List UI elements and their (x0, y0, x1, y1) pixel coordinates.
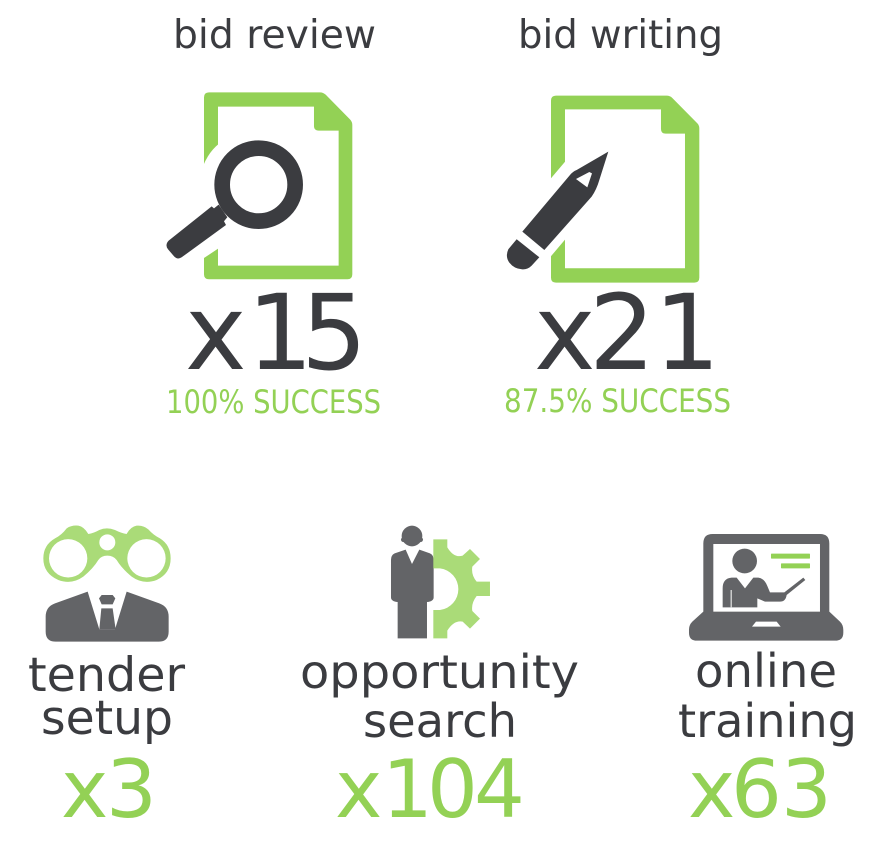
panel: bid review (166, 13, 381, 421)
icon: document with magnifying glass (166, 92, 352, 279)
icon: suit with binoculars (43, 526, 171, 642)
success rate: 87.5%: 87.5% SUCCESS (504, 382, 731, 420)
panel: bid writing (504, 13, 731, 420)
panel: online training (678, 534, 857, 836)
count: x15: x15 (185, 272, 367, 394)
label: tender setup: tender (28, 648, 186, 703)
icon: laptop with presenter (689, 534, 843, 641)
label: tender setup (28, 648, 186, 746)
count: x63: x63 (688, 743, 832, 836)
label: opportunity search: opportunity (300, 645, 579, 699)
label: opportunity search: search (363, 694, 517, 748)
heading: bid writing: bid writing (518, 13, 723, 58)
label: online training: training (678, 694, 857, 748)
label: tender setup: setup (41, 691, 173, 746)
icon: document with pencil (507, 96, 699, 283)
label: opportunity search (300, 645, 579, 748)
success rate: 100%: 100% SUCCESS (166, 383, 381, 421)
icon: person with gear (391, 526, 490, 638)
count: x21: x21 (534, 272, 720, 394)
label: online training: online (695, 644, 837, 698)
count: x3: x3 (61, 743, 157, 836)
panel: opportunity search (300, 526, 579, 836)
label: online training (678, 644, 857, 748)
heading: bid review: bid review (173, 13, 376, 58)
panel: tender setup (28, 526, 186, 836)
count: x104: x104 (335, 743, 525, 836)
